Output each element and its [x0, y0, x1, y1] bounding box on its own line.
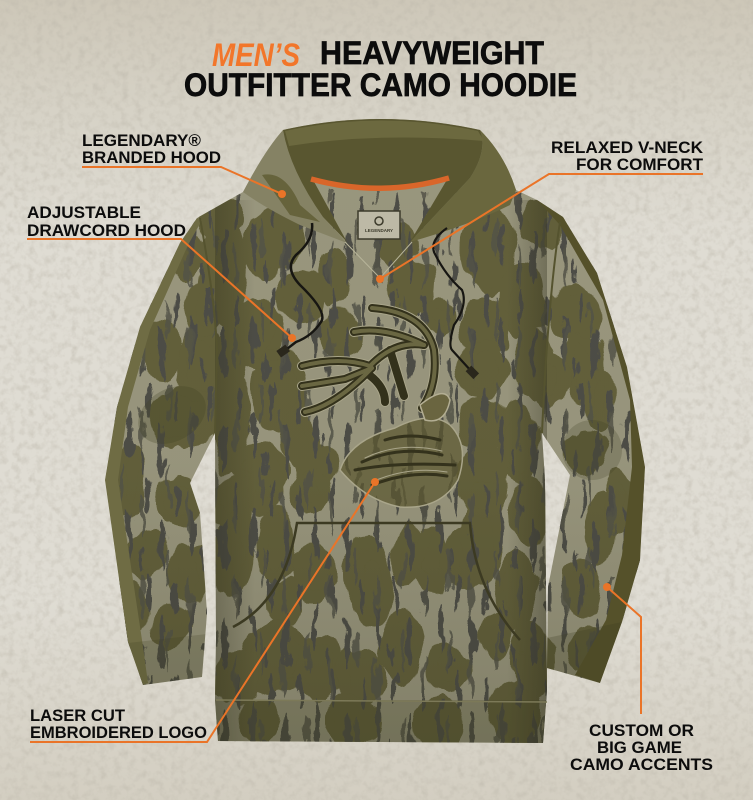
callout: adjustable drawcord hood	[27, 204, 296, 342]
neck V stitching	[345, 242, 412, 278]
callout leader line	[30, 482, 375, 742]
antlers outline	[302, 308, 435, 412]
hood lining	[283, 119, 482, 242]
callout text line two: EMBROIDERED LOGO	[30, 724, 207, 742]
left elbow fold shadow	[138, 386, 206, 444]
callout text line two: BRANDED HOOD	[82, 149, 221, 167]
hoodie camo body	[90, 105, 660, 755]
side and bottom shading	[215, 200, 547, 745]
left sleeve olive accent band	[105, 218, 202, 685]
hood flap camo patch	[262, 174, 320, 222]
deer face details	[355, 436, 455, 485]
hood	[243, 119, 516, 243]
callout text: ADJUSTABLE	[27, 204, 141, 222]
waistband	[210, 700, 550, 746]
left cuff	[128, 634, 207, 685]
right cuff	[547, 622, 622, 683]
camo patches	[118, 201, 630, 745]
right drawcord	[433, 228, 472, 372]
left drawcord	[283, 223, 322, 352]
callout text: RELAXED V-NECK	[551, 139, 703, 157]
title word: men's: MEN’S	[212, 37, 301, 73]
callout dot	[376, 275, 384, 283]
hood right flap	[410, 130, 516, 242]
orange neck trim	[311, 178, 449, 188]
title	[184, 35, 577, 103]
deer face stitching	[365, 447, 447, 481]
callout: custom camo accents	[570, 583, 713, 774]
hood left flap	[243, 130, 347, 243]
right sleeve olive accent band	[537, 200, 645, 683]
brand label: LEGENDARY	[365, 228, 393, 233]
callout text line three: CAMO ACCENTS	[570, 756, 713, 774]
callout leader line	[27, 239, 292, 338]
right elbow fold shadow	[562, 420, 622, 480]
callout dot	[371, 478, 379, 486]
right cord toggle	[466, 366, 479, 379]
brand label	[358, 211, 400, 239]
callout text: CUSTOM OR	[589, 722, 694, 740]
callout text: LASER CUT	[30, 707, 125, 725]
deer ear	[420, 394, 450, 421]
antlers dark edge	[302, 308, 435, 412]
callout leader line	[607, 587, 641, 714]
hood rim fold	[285, 120, 484, 146]
title word: heavyweight: HEAVYWEIGHT	[320, 35, 544, 71]
hoodie illustration	[90, 105, 660, 755]
callout leader line	[380, 174, 703, 279]
callout text line two: DRAWCORD HOOD	[27, 222, 186, 240]
callout dot	[288, 334, 296, 342]
callout: legendary branded hood	[82, 132, 286, 198]
left armhole seam	[200, 218, 217, 433]
callout text line two: FOR COMFORT	[576, 156, 703, 174]
deer head	[340, 418, 462, 507]
secondary bark streaks	[90, 190, 660, 750]
antlers fill	[302, 308, 435, 412]
left cord toggle	[276, 345, 290, 358]
dark bark streaks	[90, 190, 660, 750]
callout text: LEGENDARY®	[82, 132, 201, 150]
callout dot	[603, 583, 611, 591]
right armhole seam	[542, 222, 560, 433]
title line two: OUTFITTER CAMO HOODIE	[184, 67, 577, 103]
callout text line two: BIG GAME	[597, 739, 682, 757]
embroidered deer logo	[302, 308, 462, 507]
callout: relaxed v-neck	[376, 139, 703, 283]
kangaroo pocket	[233, 523, 520, 640]
callout: laser cut embroidered logo	[30, 478, 379, 742]
callout dot	[278, 190, 286, 198]
callout leader line	[82, 167, 282, 194]
waistband seam	[216, 700, 547, 702]
